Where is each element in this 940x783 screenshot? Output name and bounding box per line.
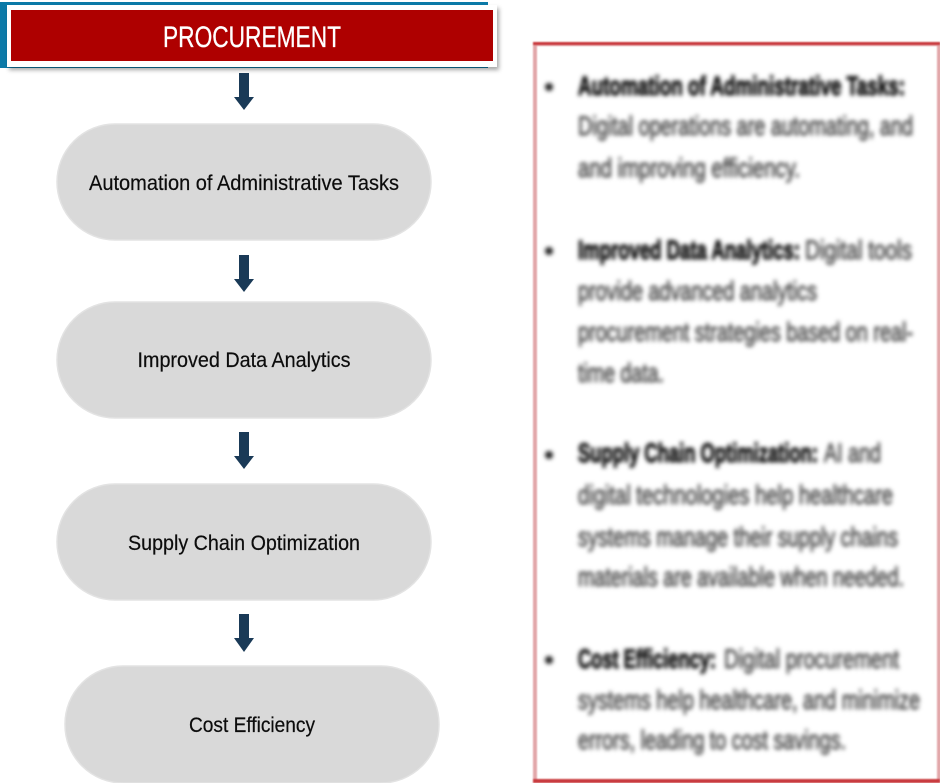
text block: data analytics details <box>545 235 913 388</box>
arrow: header to automation <box>234 73 254 110</box>
text block: cost efficiency details <box>545 644 920 755</box>
text block: supply chain details <box>545 438 904 592</box>
text block: cost efficiency details: errors, leading to cost savings. <box>578 725 846 755</box>
arrow: supply chain to cost efficiency <box>234 614 254 652</box>
text block: data analytics details: Improved Data Analytics: <box>578 235 800 265</box>
pill: supply chain optimization <box>57 484 431 600</box>
header: procurement <box>0 2 497 68</box>
text block: automation details: and improving efficiency. <box>578 153 800 183</box>
text block: automation details <box>545 71 913 183</box>
pill: automation of administrative tasks <box>57 124 431 240</box>
panel: blurred details <box>533 42 940 783</box>
pill: improved data analytics: Improved Data Analytics <box>138 349 350 372</box>
text block: supply chain details: Supply Chain Optimization: <box>578 438 818 468</box>
text block: cost efficiency details: Cost Efficiency: <box>578 644 716 674</box>
text block: data analytics details: provide advanced analytics <box>578 276 817 306</box>
pill: improved data analytics <box>57 302 431 418</box>
pill: cost efficiency <box>65 666 439 783</box>
pill: supply chain optimization: Supply Chain Optimization <box>128 532 360 555</box>
header: procurement: PROCUREMENT <box>163 21 341 54</box>
arrow: automation to analytics <box>234 255 254 292</box>
arrow: analytics to supply chain <box>234 432 254 469</box>
text block: supply chain details: AI and <box>824 438 881 468</box>
pill: cost efficiency: Cost Efficiency <box>189 714 315 737</box>
text block: data analytics details: time data. <box>578 358 664 388</box>
pill: automation of administrative tasks: Automation of Administrative Tasks <box>89 172 399 195</box>
